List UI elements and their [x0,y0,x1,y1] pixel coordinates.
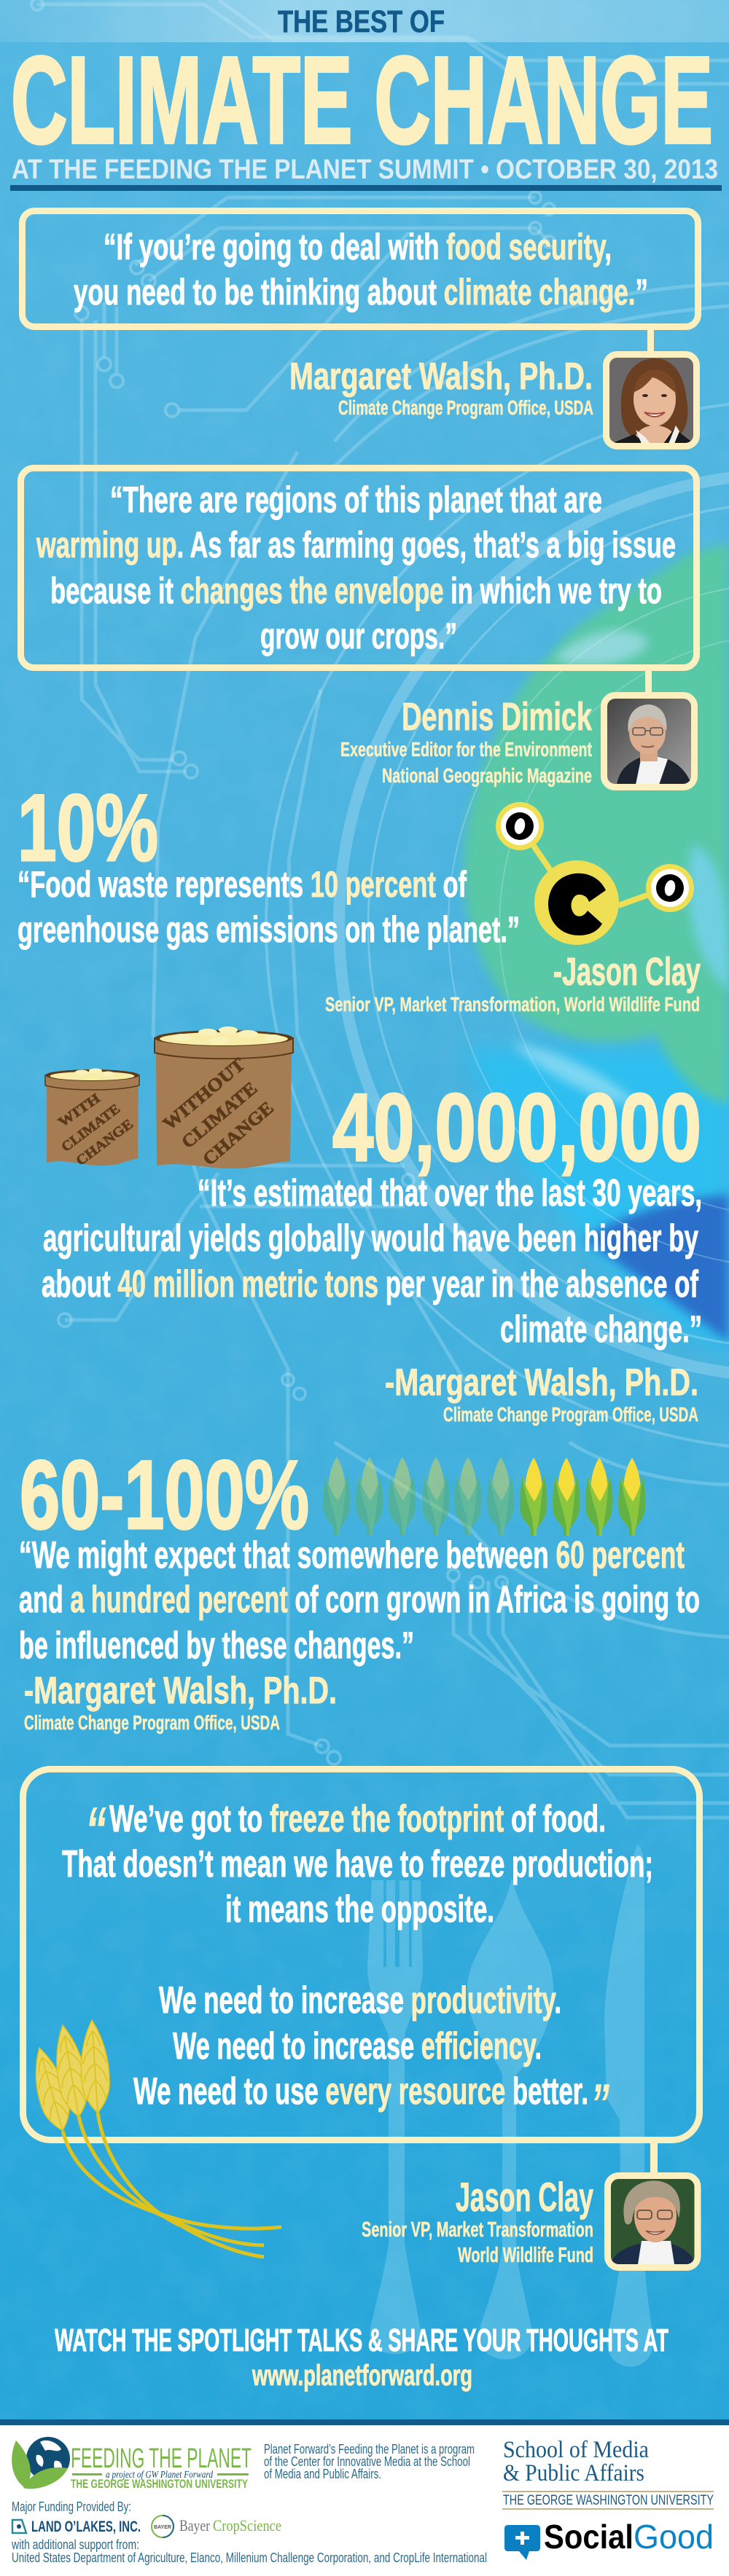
attribution: Jason Clay: World Wildlife Fund [458,2244,593,2267]
logo: bayer cropscience [152,2516,281,2537]
icon row: ten corn cobs [323,1457,645,1536]
attribution: Dennis Dimick: Dennis Dimick [402,695,593,739]
logo: feeding the planet [12,2437,252,2491]
title block [10,4,722,191]
program description: of the Center for Innovative Media at the School [264,2454,470,2469]
logo: feeding the planet: FEEDING THE PLANET [71,2443,252,2474]
funders: Major Funding Provided By: [12,2500,131,2514]
quote: corn in Africa: be influenced by these changes.” [19,1625,414,1667]
quote text [62,1794,653,2136]
quote text: “ [85,1794,106,1867]
logo: land o'lakes [12,2518,141,2535]
sack: with climate change [45,1068,139,1169]
quote text: ” [590,2072,609,2136]
logo: feeding the planet: THE GEORGE WASHINGTON UNIVERSITY [71,2477,248,2491]
stat: 10%: 10% [17,774,158,881]
panel: food security quote [22,211,698,326]
quote: food waste: “Food waste represents 10 percent of [17,864,467,905]
stat: 60-100%: 60-100% [20,1441,309,1550]
logo: bayer cropscience: BAYER [154,2525,171,2530]
attribution: Dennis Dimick [340,695,593,787]
call to action [55,2322,668,2392]
sack: without climate change: CHANGE [199,1098,278,1170]
sack: without climate change: CLIMATE [178,1078,261,1152]
panel: freeze the footprint quote [23,1769,700,2140]
sack: with climate change: CHANGE [74,1117,136,1169]
attribution: Margaret Walsh: -Margaret Walsh, Ph.D. [24,1670,337,1712]
quote text [36,479,676,656]
quote text: We need to increase efficiency. [173,2025,542,2068]
quote: food waste: greenhouse gas emissions on the planet.” [17,909,520,950]
attribution: Dennis Dimick: Executive Editor for the Environment [340,738,592,761]
funders [11,2500,487,2565]
attribution: Dennis Dimick: National Geographic Magazine [382,764,592,787]
illustration: wheat stalks [26,2019,281,2257]
icon: CO2 molecule [496,802,694,945]
program description [264,2442,475,2481]
funders: United States Department of Agriculture, Elanco, Millenium Challenge Corporation, and CropLife International [12,2551,487,2565]
title: the best of: THE BEST OF [278,4,445,39]
sack: without climate change: WITHOUT [160,1054,249,1134]
fork, leaf and knife watermark [367,1845,653,2367]
connector to portrait [650,2143,658,2174]
quote: corn in Africa [19,1534,700,1667]
footer [0,2419,729,2576]
logo: bayer cropscience: CropScience [213,2516,281,2534]
portrait: Margaret Walsh [607,354,697,446]
program description: of Media and Public Affairs. [264,2467,381,2481]
attribution: Margaret Walsh [24,1670,337,1734]
portrait: Dennis Dimick [604,695,694,787]
attribution: Margaret Walsh: Climate Change Program Office, USDA [338,396,593,419]
attribution: Jason Clay: Jason Clay [456,2174,593,2220]
connector to portrait [645,671,652,694]
quote text: We need to use every resource better. [133,2070,588,2113]
attribution: Margaret Walsh [385,1362,698,1426]
quote text: We’ve got to freeze the footprint of food. [109,1798,606,1840]
quote text: you need to be thinking about climate change.” [74,272,648,313]
sack: with climate change: CLIMATE [58,1102,123,1155]
logo: social good: Good [634,2518,714,2556]
illustration: grain sacks [45,1026,293,1170]
attribution: Jason Clay: Senior VP, Market Transformation [362,2218,593,2242]
portrait: Jason Clay [608,2175,698,2267]
attribution: Margaret Walsh: Climate Change Program Office, USDA [24,1711,280,1734]
quote text: We need to increase productivity. [159,1979,561,2022]
call to action: www.planetforward.org [252,2360,472,2392]
title rule [10,185,722,191]
logo: school of media and public affairs: School of Media [503,2437,649,2463]
logo: social good [504,2518,714,2560]
quote: food waste [17,864,520,950]
circuit traces [31,0,729,1818]
quote text [74,227,648,313]
logo: feeding the planet: a project of GW Planet Forward [106,2470,214,2481]
program description: Planet Forward’s Feeding the Planet is a program [264,2442,475,2457]
globe illustration [266,401,729,1450]
attribution: Jason Clay [362,2174,593,2267]
quote text: grow our crops.” [260,616,457,656]
sack: without climate change [155,1026,293,1170]
attribution: Margaret Walsh [289,356,593,419]
logo: land o'lakes: LAND O’LAKES, INC. [31,2518,141,2535]
connector to portrait [647,330,654,352]
logo: bayer cropscience: Bayer [179,2516,211,2534]
quote: agricultural yields [42,1172,702,1351]
panel: warming regions quote [20,468,697,667]
sack: with climate change: WITH [55,1091,104,1131]
attribution: Jason Clay [325,950,701,1016]
logo: school of media and public affairs: & Public Affairs [503,2460,644,2486]
attribution: Margaret Walsh: Margaret Walsh, Ph.D. [289,356,593,398]
quote text: it means the opposite. [225,1888,494,1931]
logo: social good: Social [544,2518,634,2556]
quote text: “If you’re going to deal with food security, [104,227,612,267]
logo: school of media and public affairs [502,2437,714,2510]
funders: with additional support from: [11,2537,139,2552]
